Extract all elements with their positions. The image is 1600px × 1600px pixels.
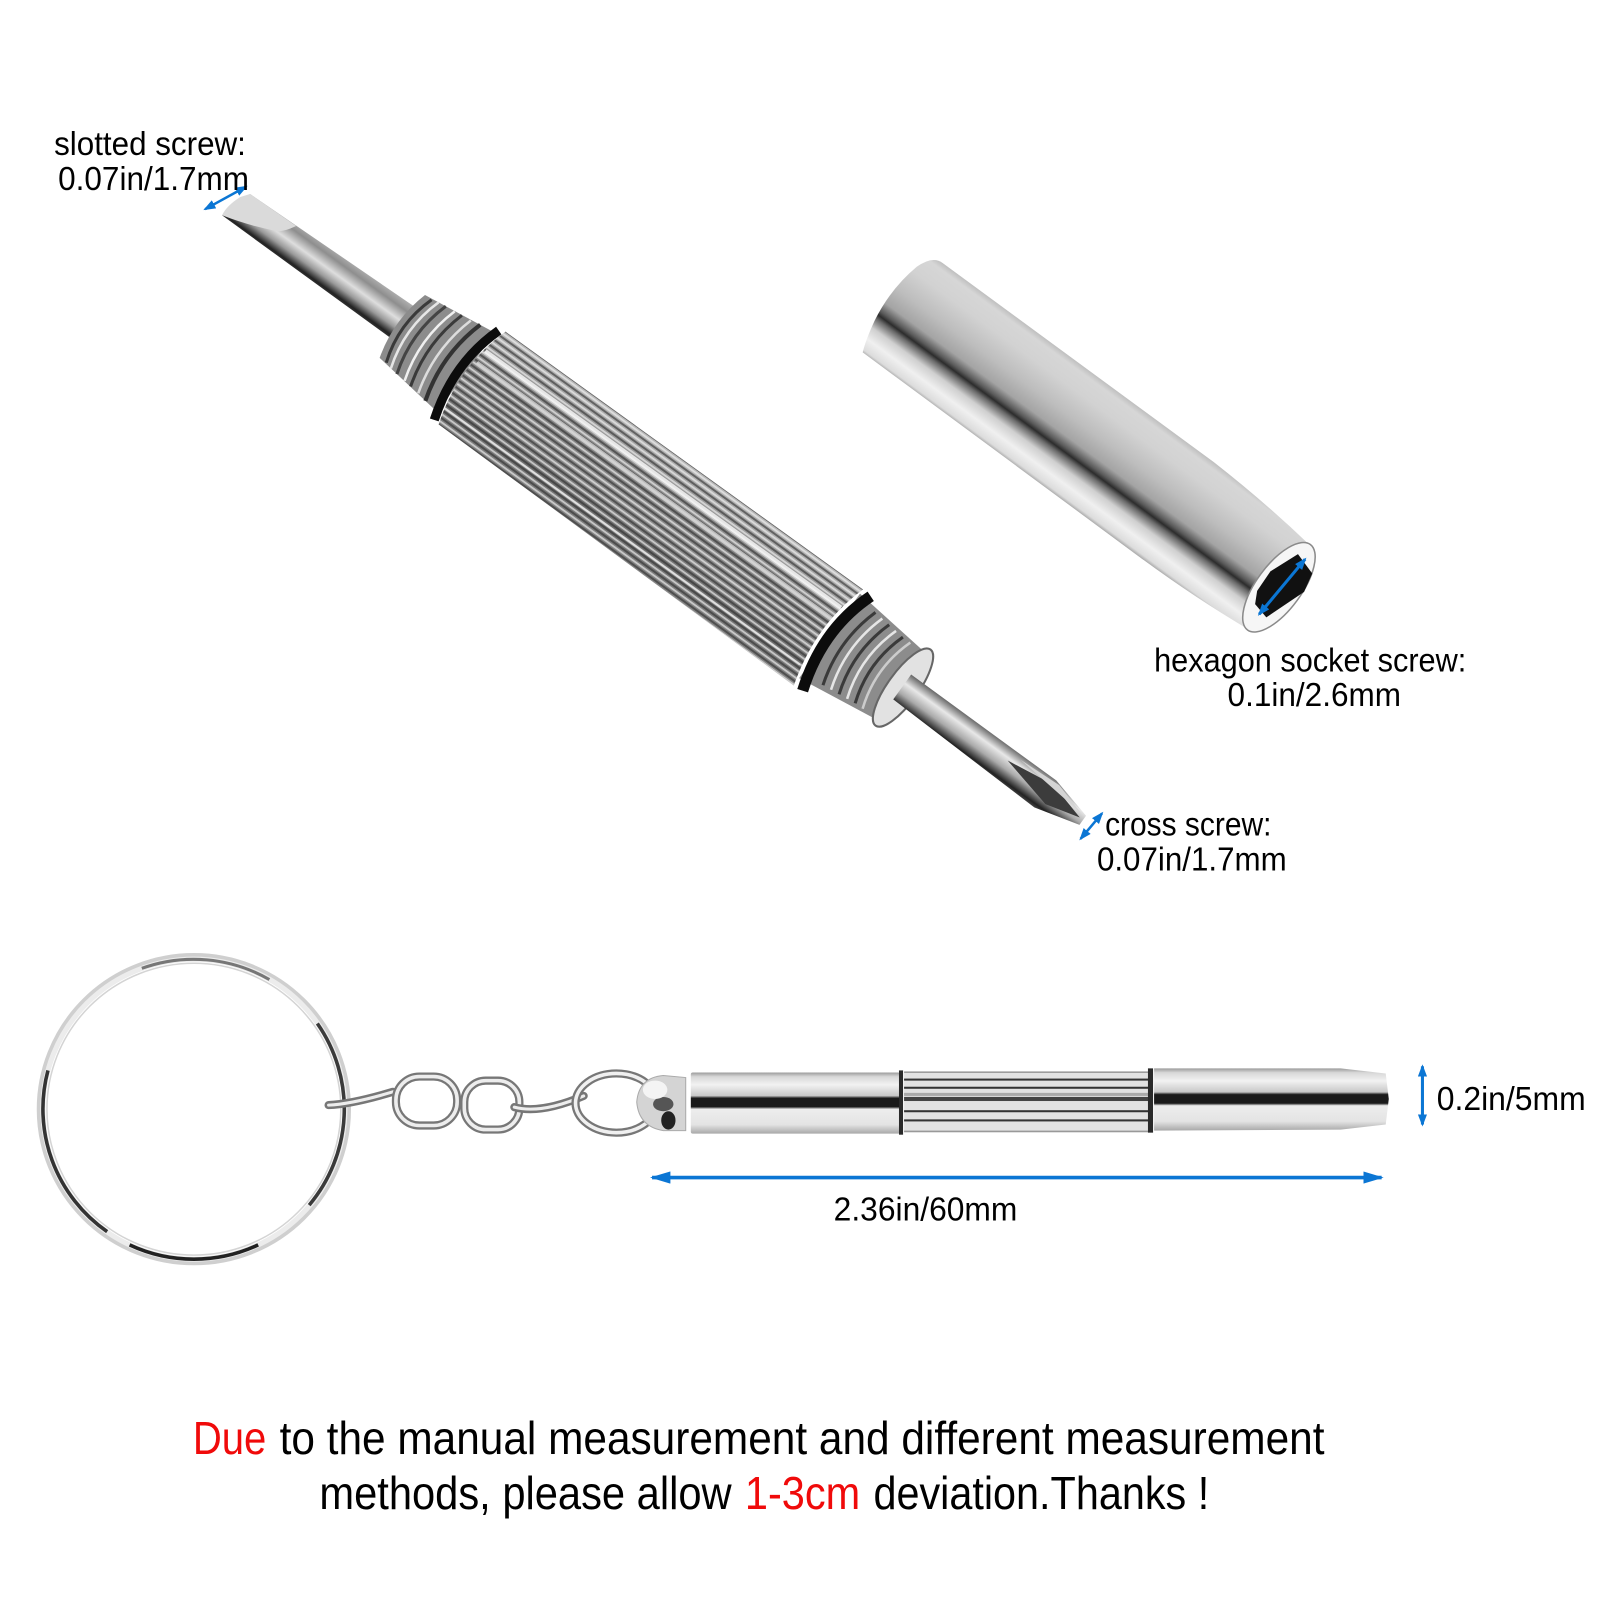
note: measurement deviation: Due xyxy=(193,1412,266,1464)
pen-style screwdriver: right barrel xyxy=(1154,1068,1389,1131)
label: cross screw: 0.07in/1.7mm xyxy=(1097,841,1287,878)
arrow: diameter xyxy=(1421,1066,1424,1124)
left thread xyxy=(364,280,499,420)
label: slotted screw: slotted screw: xyxy=(54,126,246,163)
arrow: slotted tip size xyxy=(205,187,246,209)
pen-style screwdriver: ball end xyxy=(637,1076,686,1131)
note: measurement deviation xyxy=(193,1412,1325,1519)
pen-style screwdriver: left barrel xyxy=(691,1072,900,1134)
socket opening xyxy=(1255,554,1312,617)
arrow: cross tip size xyxy=(1081,813,1102,839)
note: measurement deviation: methods, please allow xyxy=(319,1467,732,1519)
label: diameter: 0.2in/5mm xyxy=(1437,1081,1586,1118)
arrow: overall length xyxy=(652,1176,1382,1179)
note: measurement deviation: 1-3cm xyxy=(745,1467,860,1519)
screwdriver: disassembled body xyxy=(194,157,1117,869)
label: hexagon socket screw: 0.1in/2.6mm xyxy=(1228,677,1401,714)
note: measurement deviation: to the manual measurement and different measurement xyxy=(280,1412,1325,1464)
key chain links xyxy=(329,1073,657,1133)
screwdriver cap with hexagon socket xyxy=(853,249,1334,647)
arrow: hexagon socket size xyxy=(1259,559,1305,614)
right thread and collar xyxy=(794,590,948,746)
knurled grip xyxy=(429,326,863,686)
label: overall length: 2.36in/60mm xyxy=(834,1191,1017,1228)
label: slotted screw xyxy=(54,126,249,198)
label: hexagon socket screw xyxy=(1154,642,1466,714)
pen-style screwdriver: ridged grip xyxy=(899,1068,1153,1135)
label: hexagon socket screw: hexagon socket screw: xyxy=(1154,642,1466,679)
slotted shaft and tip xyxy=(221,184,424,346)
key ring xyxy=(39,955,349,1263)
label: cross screw xyxy=(1097,807,1287,878)
label: cross screw: cross screw: xyxy=(1105,807,1271,844)
label: slotted screw: 0.07in/1.7mm xyxy=(58,161,249,198)
note: measurement deviation: deviation.Thanks ! xyxy=(873,1467,1209,1519)
cross-head shaft and tip xyxy=(890,675,1093,835)
